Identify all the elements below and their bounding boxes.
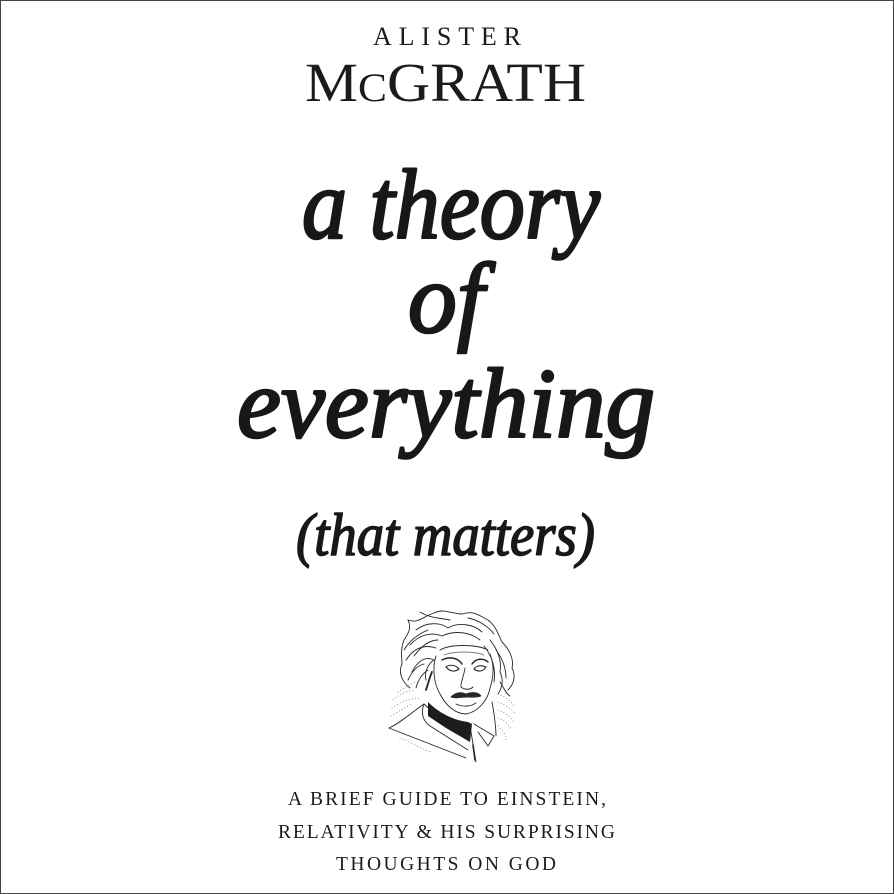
icon: engraved portrait of Einstein	[389, 611, 516, 762]
title line: everything: everything	[237, 348, 655, 459]
author surname: MCGRATH	[305, 52, 586, 113]
tagline line 3: THOUGHTS ON GOD	[336, 854, 556, 875]
title line: a theory: a theory	[302, 149, 601, 260]
coat	[389, 702, 496, 762]
author first name: ALISTER	[373, 22, 522, 51]
face	[434, 646, 493, 714]
title line: of: of	[408, 243, 496, 354]
title	[237, 149, 655, 568]
tagline line 1: A BRIEF GUIDE TO EINSTEIN,	[288, 789, 606, 810]
tagline line 2: RELATIVITY & HIS SURPRISING	[278, 822, 615, 843]
hair	[400, 611, 514, 696]
stipple shading	[391, 682, 516, 752]
subtitle line: (that matters): (that matters)	[296, 502, 595, 568]
tagline	[278, 789, 615, 875]
